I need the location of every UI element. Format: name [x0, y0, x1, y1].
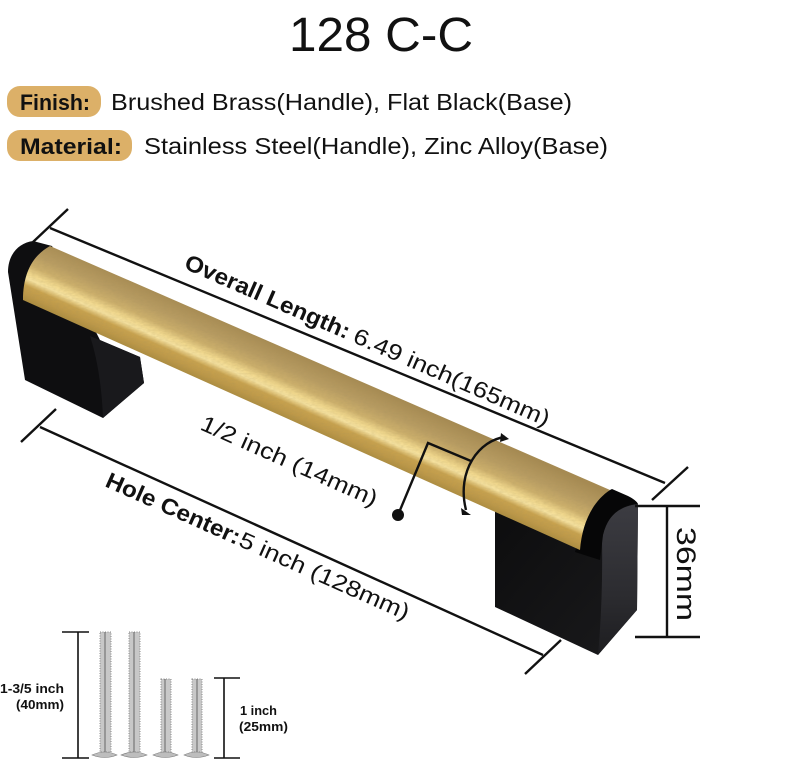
material badge [7, 130, 132, 161]
handle product image [8, 241, 638, 655]
screws [92, 632, 209, 758]
short screw label: (25mm) [239, 720, 288, 734]
height dimension [635, 506, 701, 637]
height label: 36mm [671, 527, 701, 621]
overall length label [181, 250, 554, 431]
hole center dimension line [21, 409, 561, 674]
finish value: Brushed Brass(Handle), Flat Black(Base) [111, 89, 572, 115]
diameter annotation [392, 433, 509, 521]
overall length label: Overall Length: [181, 250, 354, 344]
overall length dimension line [33, 209, 688, 500]
long screw 2 [121, 632, 147, 758]
overall length label: 6.49 inch(165mm) [350, 323, 554, 431]
long screw dimension [62, 632, 89, 758]
diameter label: 1/2 inch (14mm) [197, 411, 382, 511]
hole center label: 5 inch (128mm) [235, 527, 414, 625]
finish label: Finish: [20, 90, 90, 115]
left base [8, 241, 144, 418]
short screw 1 [153, 679, 178, 758]
long screw 1 [92, 632, 117, 758]
short screw dimension [214, 678, 240, 758]
rotation arc arrow [464, 437, 505, 510]
leader dot [392, 509, 404, 521]
short screw label: 1 inch [240, 704, 277, 718]
short screw 2 [184, 679, 209, 758]
brass bar [23, 246, 610, 550]
long screw label: 1-3/5 inch [0, 682, 64, 696]
finish row [7, 86, 572, 117]
long screw label: (40mm) [16, 698, 64, 712]
title: 128 C-C [289, 9, 473, 62]
hole center label [102, 468, 414, 625]
material label: Material: [20, 134, 122, 159]
hole center label: Hole Center: [102, 468, 245, 550]
leader line [398, 443, 471, 515]
material value: Stainless Steel(Handle), Zinc Alloy(Base) [144, 133, 608, 159]
finish badge [7, 86, 101, 117]
right base [495, 489, 638, 655]
material row [7, 130, 608, 161]
